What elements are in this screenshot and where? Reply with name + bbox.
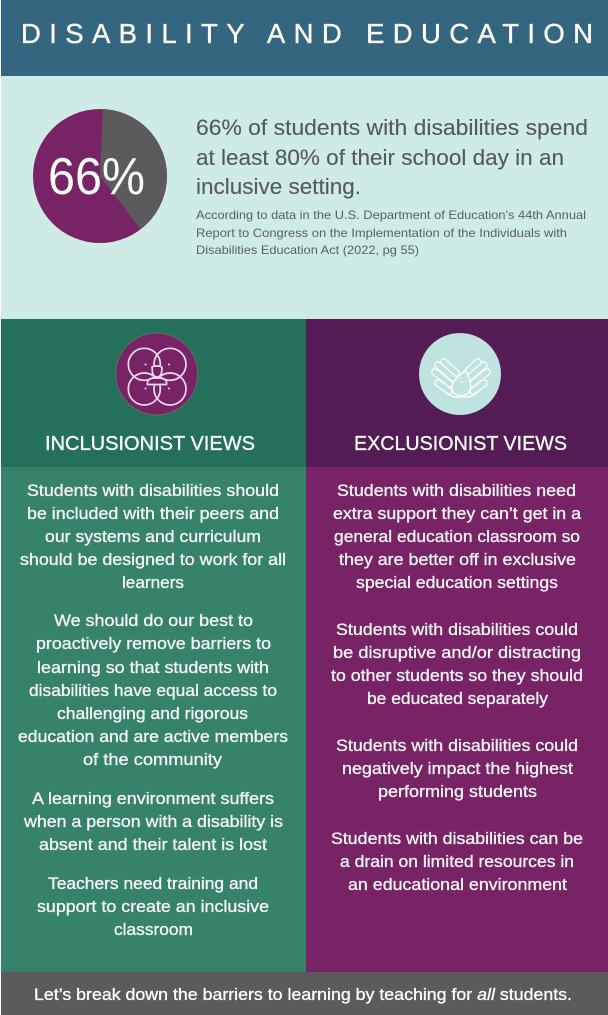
statistic statement bbox=[196, 115, 588, 199]
source citation bbox=[196, 208, 586, 257]
exclusionist point 4: Students with disabilities can be bbox=[331, 829, 583, 848]
inclusionist point 3 bbox=[23, 789, 283, 854]
inclusionist point 1: learners bbox=[122, 573, 184, 592]
heading: inclusionist views: INCLUSIONIST VIEWS bbox=[45, 433, 255, 455]
pie chart: 66% bbox=[33, 109, 167, 243]
exclusionist point 4: a drain on limited resources in bbox=[340, 852, 574, 871]
source citation: Report to Congress on the Implementation of the Individuals with bbox=[196, 226, 567, 240]
inclusionist point 4 bbox=[37, 874, 269, 939]
statistic statement: 66% of students with disabilities spend bbox=[196, 115, 588, 140]
exclusionist point 1: special education settings bbox=[356, 573, 558, 592]
exclusionist point 2: Students with disabilities could bbox=[336, 620, 578, 639]
icon: overlapping circles with person bbox=[116, 333, 198, 415]
exclusionist point 3: performing students bbox=[378, 782, 537, 801]
inclusionist point 1 bbox=[20, 481, 286, 592]
inclusionist point 4: Teachers need training and bbox=[48, 874, 258, 893]
exclusionist point 1: Students with disabilities need bbox=[337, 481, 576, 500]
inclusionist point 1: be included with their peers and bbox=[27, 504, 279, 523]
inclusionist point 3: A learning environment suffers bbox=[32, 789, 274, 808]
inclusionist point 2: education and are active members bbox=[18, 727, 288, 746]
pie chart: 66%: 66% bbox=[48, 148, 145, 206]
source citation: According to data in the U.S. Department of Education's 44th Annual bbox=[196, 208, 586, 222]
exclusionist point 4 bbox=[331, 829, 583, 894]
inclusionist point 2: challenging and rigorous bbox=[57, 704, 248, 723]
icon: hands holding a drop bbox=[419, 333, 501, 415]
inclusionist point 4: support to create an inclusive bbox=[37, 897, 269, 916]
inclusionist point 3: absent and their talent is lost bbox=[39, 835, 267, 854]
exclusionist point 3 bbox=[336, 736, 578, 801]
exclusionist point 1: extra support they can’t get in a bbox=[333, 504, 582, 523]
header banner bbox=[1, 0, 608, 76]
inclusionist point 1: our systems and curriculum bbox=[45, 527, 261, 546]
footer banner bbox=[1, 972, 608, 1015]
panel: key statistic bbox=[1, 76, 608, 319]
inclusionist point 2: proactively remove barriers to bbox=[36, 634, 271, 653]
inclusionist point 4: classroom bbox=[114, 920, 193, 939]
exclusionist point 3: Students with disabilities could bbox=[336, 736, 578, 755]
exclusionist point 4: an educational environment bbox=[348, 875, 567, 894]
exclusionist point 1: general education classroom so bbox=[334, 527, 580, 546]
title: DISABILITY AND EDUCATION bbox=[21, 18, 593, 49]
inclusionist point 3: when a person with a disability is bbox=[23, 812, 283, 831]
closing message: Let’s break down the barriers to learning by teaching for all students. bbox=[34, 986, 572, 1004]
inclusionist point 1: Students with disabilities should bbox=[27, 481, 279, 500]
exclusionist point 2: be disruptive and/or distracting bbox=[333, 643, 581, 662]
inclusionist point 2: disabilities have equal access to bbox=[29, 681, 277, 700]
source citation: Disabilities Education Act (2022, pg 55) bbox=[196, 243, 419, 257]
inclusionist point 1: should be designed to work for all bbox=[20, 550, 286, 569]
statistic statement: at least 80% of their school day in an bbox=[196, 145, 564, 170]
statistic statement: inclusive setting. bbox=[196, 174, 361, 199]
inclusionist point 2: learning so that students with bbox=[37, 658, 269, 677]
exclusionist point 2 bbox=[331, 620, 583, 708]
inclusionist point 2: We should do our best to bbox=[54, 611, 253, 630]
inclusionist point 2: of the community bbox=[83, 750, 223, 769]
inclusionist point 2 bbox=[18, 611, 288, 769]
exclusionist point 2: to other students so they should bbox=[331, 666, 583, 685]
exclusionist point 3: negatively impact the highest bbox=[342, 759, 573, 778]
exclusionist point 1: they are better off in exclusive bbox=[339, 550, 576, 569]
exclusionist point 2: be educated separately bbox=[367, 689, 549, 708]
panel: inclusionist views bbox=[1, 319, 306, 972]
exclusionist point 1 bbox=[333, 481, 582, 592]
panel: exclusionist views bbox=[306, 319, 608, 972]
heading: exclusionist views: EXCLUSIONIST VIEWS bbox=[354, 433, 567, 455]
